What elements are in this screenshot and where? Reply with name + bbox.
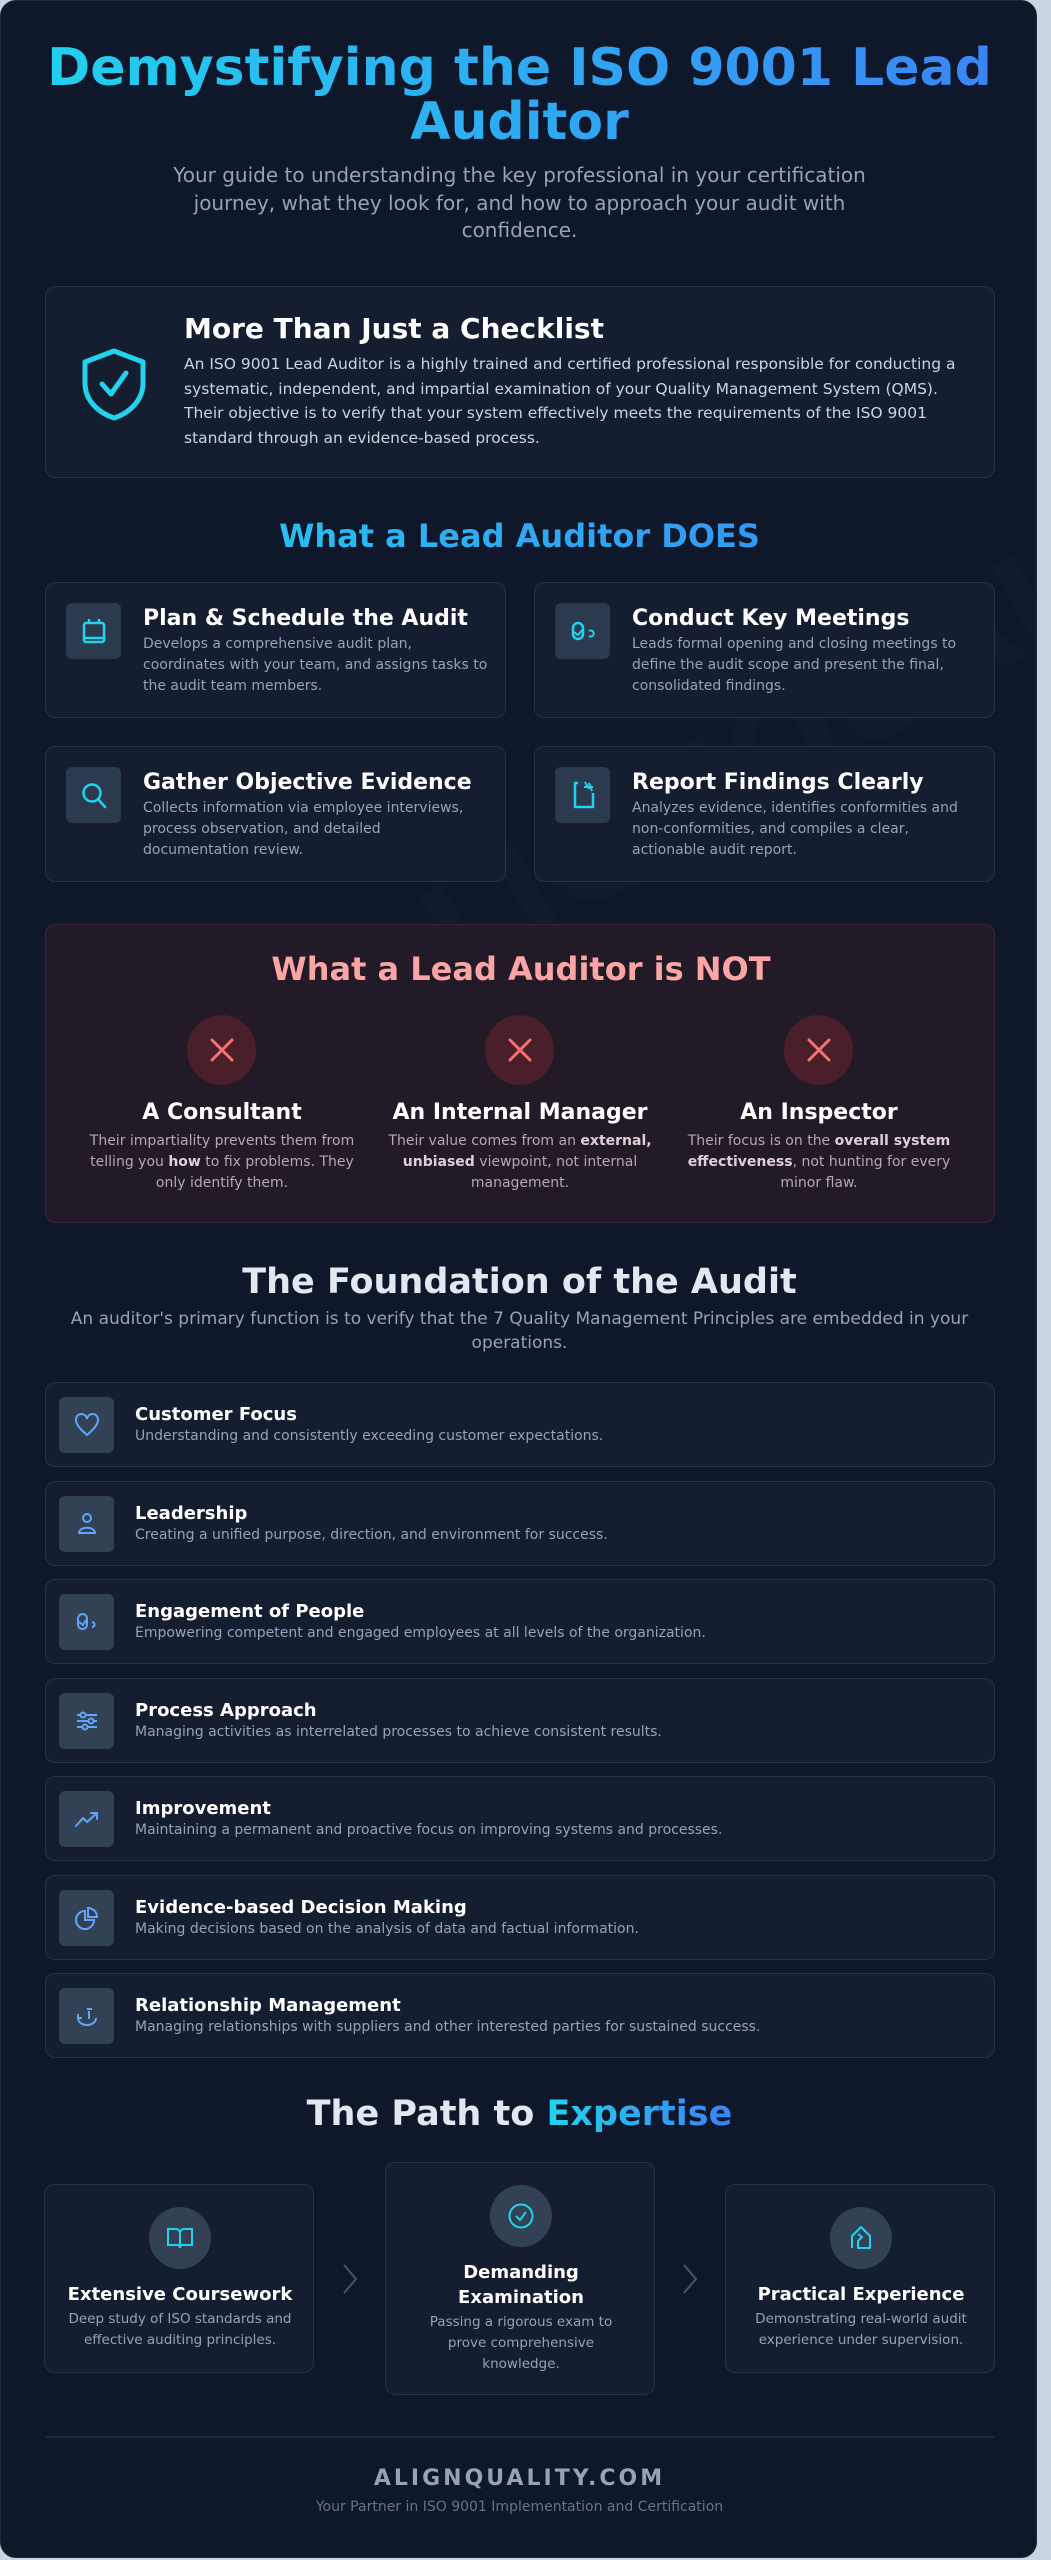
principle: improvement: Improvement bbox=[135, 1798, 271, 1819]
principle: improvement bbox=[45, 1776, 995, 1861]
principle: leadership bbox=[45, 1481, 995, 1566]
icon: shield bbox=[82, 348, 146, 420]
item: inspector bbox=[688, 1015, 950, 1191]
footer: brand: ALIGNQUALITY.COM bbox=[374, 2466, 665, 2491]
panel: more than just a checklist bbox=[45, 286, 995, 478]
step: examination: Demanding bbox=[463, 2262, 579, 2283]
item: internal manager: Their value comes from an external, unbiased viewpoint, not internal management. bbox=[388, 1133, 652, 1191]
panel: gather evidence: Gather Objective Evidence bbox=[143, 770, 472, 795]
arrow bbox=[343, 2264, 358, 2294]
step: examination: Passing a rigorous exam to prove comprehensive knowledge. bbox=[430, 2314, 612, 2372]
item: internal manager: An Internal Manager bbox=[393, 1100, 647, 1125]
step: practical experience: Practical Experience bbox=[758, 2284, 964, 2305]
panel: conduct key meetings bbox=[534, 582, 995, 718]
item: inspector: An Inspector bbox=[740, 1100, 898, 1125]
heading: what a lead auditor does bbox=[1, 516, 1038, 556]
step: coursework: Deep study of ISO standards and effective auditing principles. bbox=[68, 2311, 291, 2348]
text block: An ISO 9001 Lead Auditor is a highly trained and certified professional responsible for conducting a systematic, independent, and impartial examination of your Quality Management System (QMS). Their objective is to verify that your system effectively meets the requirements of the ISO 9001 standard through an evidence-based process. bbox=[184, 355, 956, 446]
item: internal manager bbox=[388, 1015, 652, 1191]
title bbox=[1, 41, 1038, 149]
title: Auditor bbox=[410, 92, 629, 152]
panel: plan & schedule: Develops a comprehensive audit plan, coordinates with your team, and assigns tasks to the audit team members. bbox=[143, 636, 487, 694]
subtitle: Your guide to understanding the key professional in your certification journey, what they look for, and how to approach your audit with confidence. bbox=[173, 163, 866, 242]
heading: What a Lead Auditor is NOT bbox=[271, 950, 771, 988]
item: consultant bbox=[90, 1015, 354, 1191]
step: practical experience: Demonstrating real-world audit experience under supervision. bbox=[755, 2311, 967, 2348]
principle: engagement: Engagement of People bbox=[135, 1601, 364, 1622]
footer: tagline: Your Partner in ISO 9001 Implementation and Certification bbox=[316, 2499, 723, 2515]
principle: relationship management: Relationship Management bbox=[135, 1995, 401, 2016]
principle: evidence-based bbox=[45, 1875, 995, 1960]
principle: process approach: Managing activities as interrelated processes to achieve consistent results. bbox=[135, 1724, 662, 1740]
panel: gather evidence bbox=[45, 746, 506, 882]
principle: engagement bbox=[45, 1579, 995, 1664]
panel: gather evidence: Collects information via employee interviews, process observation, and detailed documentation review. bbox=[143, 800, 463, 858]
panel: what a lead auditor is NOT bbox=[45, 924, 995, 1223]
principle: customer focus bbox=[45, 1382, 995, 1467]
principle: engagement: Empowering competent and engaged employees at all levels of the organization. bbox=[135, 1625, 706, 1641]
heading: path to expertise: The Path to Expertise bbox=[307, 2094, 732, 2134]
step: practical experience bbox=[725, 2184, 995, 2373]
panel: plan & schedule bbox=[45, 582, 506, 718]
panel: report findings bbox=[534, 746, 995, 882]
principle: relationship management bbox=[45, 1973, 995, 2058]
step: coursework bbox=[44, 2184, 314, 2373]
step: examination bbox=[385, 2162, 655, 2395]
item: consultant: Their impartiality prevents them from telling you how to fix problems. They only identify them. bbox=[90, 1133, 354, 1191]
principle: relationship management: Managing relationships with suppliers and other interested parties for sustained success. bbox=[135, 2019, 760, 2035]
principle: leadership: Leadership bbox=[135, 1503, 247, 1524]
step: examination: Examination bbox=[458, 2286, 584, 2308]
icon: meetings bbox=[555, 603, 610, 659]
principle: evidence-based: Evidence-based Decision Making bbox=[135, 1897, 467, 1918]
heading: foundation: The Foundation of the Audit bbox=[242, 1262, 797, 1302]
principle: customer focus: Understanding and consistently exceeding customer expectations. bbox=[135, 1428, 603, 1444]
heading: More Than Just a Checklist bbox=[184, 312, 604, 345]
icon: document bbox=[555, 767, 610, 823]
principle: leadership: Creating a unified purpose, direction, and environment for success. bbox=[135, 1527, 608, 1543]
principle: process approach: Process Approach bbox=[135, 1700, 317, 1721]
panel: conduct key meetings: Leads formal opening and closing meetings to define the audit scope and present the final, consolidated findings. bbox=[632, 636, 956, 694]
step: coursework: Extensive Coursework bbox=[68, 2284, 292, 2305]
panel: report findings: Analyzes evidence, identifies conformities and non-conformities, and compiles a clear, actionable audit report. bbox=[632, 800, 958, 858]
principle: process approach bbox=[45, 1678, 995, 1763]
heading: what a lead auditor does: What a Lead Auditor DOES bbox=[279, 517, 760, 555]
arrow bbox=[683, 2264, 698, 2294]
title: Demystifying the ISO 9001 Lead bbox=[47, 38, 992, 98]
panel: conduct key meetings: Conduct Key Meetings bbox=[632, 606, 909, 631]
icon: calendar bbox=[66, 603, 121, 659]
panel: plan & schedule: Plan & Schedule the Audit bbox=[143, 606, 468, 631]
item: inspector: Their focus is on the overall system effectiveness, not hunting for every minor flaw. bbox=[688, 1133, 950, 1191]
principle: improvement: Maintaining a permanent and proactive focus on improving systems and processes. bbox=[135, 1822, 722, 1838]
panel: report findings: Report Findings Clearly bbox=[632, 770, 924, 795]
principle: customer focus: Customer Focus bbox=[135, 1404, 297, 1425]
subtitle: foundation: An auditor's primary function is to verify that the 7 Quality Management Principles are embedded in your operations. bbox=[71, 1309, 968, 1353]
icon: search bbox=[66, 767, 121, 823]
item: consultant: A Consultant bbox=[142, 1100, 302, 1125]
principle: evidence-based: Making decisions based on the analysis of data and factual information. bbox=[135, 1921, 639, 1937]
